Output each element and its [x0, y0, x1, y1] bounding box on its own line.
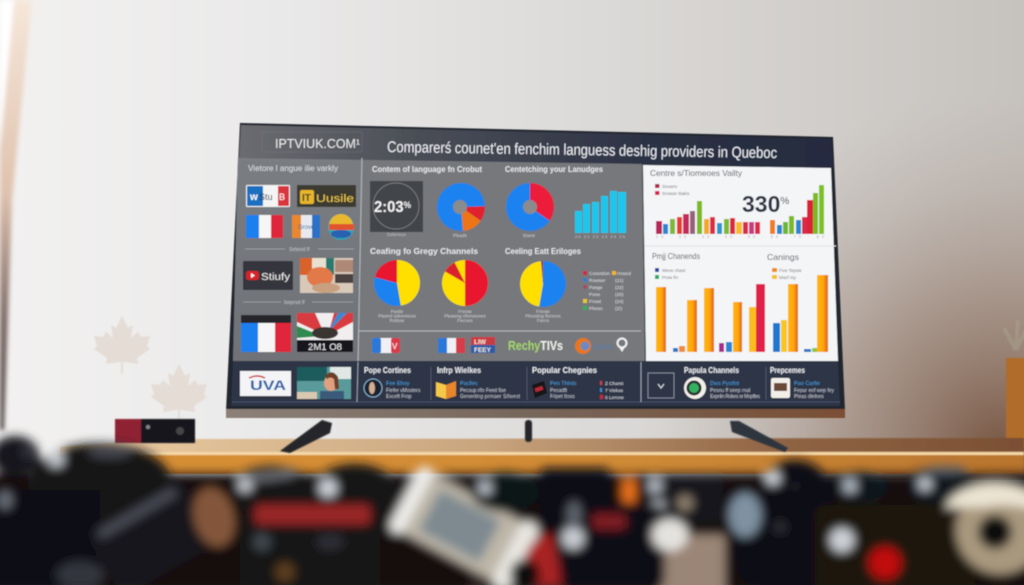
stat tile 2:03%: 2:03: [374, 199, 406, 216]
logo: orange globe: [575, 338, 613, 354]
info block: Pope Cortines: Flefer vMosters: [386, 388, 421, 394]
info block: Popular Chegnies: Pen Thirds: [550, 381, 577, 387]
info block: Pope Cortines: Pope Cortines: [364, 366, 411, 375]
screen header bar: Comparerś counet'en fenchim languess deshig providers in Queboc: [387, 139, 777, 162]
info block: Prepcemes: Pleas dlelnes: [794, 394, 824, 400]
TV bezel: [226, 123, 845, 411]
logo: live feey: FEEY: [474, 347, 492, 354]
logo: UVA: [240, 371, 291, 396]
lower chart legends: Miarf Isy: [779, 275, 797, 280]
donut chart 1: [437, 183, 485, 238]
pie chart 5: Frieste: [536, 309, 550, 314]
logo: wStub: w: [249, 192, 258, 203]
pie chart 4: Frieste: [458, 309, 472, 314]
lower chart legends: Five Tepsie: [779, 268, 802, 273]
blurred foreground camera gear: [0, 436, 1024, 585]
logo: IT Uusile: Uusile: [316, 193, 354, 205]
screen header bar: [239, 125, 833, 168]
logo: V badge: V: [392, 342, 398, 351]
pie legend: [583, 271, 631, 312]
TV set: [226, 123, 845, 418]
info block: Papula Channels: Dws Pystfot: [710, 381, 740, 387]
upper chart legend: Snowre: [662, 184, 678, 189]
info block: Popular Chegnies: Fripet Itoxs: [550, 394, 575, 400]
info block: Popular Chegnies: 7 Viskas: [605, 388, 624, 394]
photo thumbnail: [297, 367, 351, 399]
lower chart legends: [655, 268, 802, 280]
TV chin: [226, 409, 845, 418]
logo: wStub: Stu: [259, 192, 273, 202]
stat 330%: 330: [742, 191, 780, 217]
photo collage: [300, 258, 353, 293]
small red and black device: [115, 419, 195, 443]
stat tile 2:03%: %: [404, 200, 411, 210]
center lumps: [471, 472, 539, 512]
middle lumps: [230, 466, 314, 514]
info block: Papula Channels: Pesou ff seep rnal: [710, 388, 750, 394]
cream ring lens: [956, 486, 1024, 574]
poster 2M1 O8: 2M1 O8: [308, 342, 342, 353]
lower chart legends: Weve chast: [662, 268, 686, 273]
logo: Grovc: Grovc: [298, 225, 314, 231]
divider label: [243, 300, 353, 306]
logo: wStub: [246, 185, 290, 207]
logo row: [359, 331, 641, 354]
info block: Papula Channels: [684, 366, 760, 400]
angled lens cylinder: [85, 478, 218, 585]
pie chart 5: Fiercs: [537, 318, 550, 323]
donut chart 2: [506, 183, 554, 238]
icon: maple leaf upper: [94, 316, 150, 374]
lower chart heading right: Canings: [767, 252, 799, 262]
info block: Prepcemes: Pao Carfie: [794, 381, 820, 387]
stat tile 2:03%: Delensus: [387, 232, 407, 237]
lower chart legends: Prow fin: [662, 275, 679, 280]
upper chart legend: [655, 184, 690, 196]
logo: Stiufy: [243, 261, 293, 290]
icon: pin: [618, 338, 626, 352]
info block: Pope Cortines: Exceft Frop: [386, 394, 412, 400]
chevron box: [648, 373, 674, 398]
pie legend: Pasge: [589, 285, 603, 291]
info block: Papula Channels: Expnlin Rokes or Mopftes: [710, 394, 760, 400]
upper chart legend: Srowan Bakis: [662, 191, 690, 196]
left lumps: [0, 436, 39, 476]
logo: Stiufy: Stiufy: [261, 272, 290, 283]
info block: Popular Chegnies: [532, 366, 624, 401]
stat 330%: %: [780, 196, 789, 207]
upper bar chart: 10 · 20 · 30 · 40 · 50 · 60 · 70 · 80: [656, 235, 824, 239]
info block: Infrp Wielkes: Pecsup rlfo Feed fise: [460, 388, 506, 394]
pie chart 4: Pleasing vfrensiones: [444, 314, 487, 318]
info block: Prepcemes: Prepcemes: [770, 366, 805, 375]
logo: live feey: LIW: [474, 339, 487, 346]
pie chart 3: Plastrd vidrenisces: [378, 314, 417, 318]
section heading: channels: Ceafing fo Gregy Channels: [370, 246, 478, 256]
info block: Papula Channels: Papula Channels: [684, 366, 739, 375]
pie legend: (22): [615, 285, 624, 291]
TV stand legs: [280, 420, 788, 453]
pie chart 3: Pastle: [391, 309, 404, 314]
white cylinder: [387, 463, 542, 585]
section heading: your language: Centetching your Lanudges: [505, 165, 603, 174]
divider label: [245, 247, 354, 253]
pie chart 4: Fiecses: [457, 318, 473, 323]
info block: Prepcemes: [770, 366, 835, 400]
info block: Popular Chegnies: Pecadft: [550, 388, 568, 394]
lower chart heading left: Pmjj Chanends: [652, 251, 700, 261]
donut chart 2: Doest: [523, 233, 536, 238]
logo: V badge: [372, 338, 400, 353]
pie legend: (2!): [615, 306, 623, 312]
divider label: Iseprsd If: [284, 300, 305, 306]
cyan bar chart: [575, 191, 626, 239]
pie chart 3: Rolisse: [390, 318, 405, 323]
info block: Pope Cortines: Fee Ehoy: [386, 381, 410, 387]
right lumps: [757, 460, 833, 536]
pie legend: (21): [615, 278, 624, 284]
big flag: [241, 315, 291, 352]
shelf: [36, 438, 1024, 474]
upper chart heading: Centre s/Tiomeoes Vailty: [650, 168, 743, 178]
pie chart 5: Pleusting florsces: [525, 314, 561, 318]
info block: Popular Chegnies: 6 Lerone: [605, 395, 624, 401]
window frame: [0, 0, 32, 430]
pie legend: Rowser: [589, 278, 606, 284]
section heading: east: Ceeling Eatt Eriloges: [505, 246, 581, 256]
screen header bar: IPTVIUK.COM¹: [275, 137, 360, 151]
info block: Infrp Wielkes: Infrp Wielkes: [437, 366, 481, 375]
pie chart 3: [374, 260, 420, 323]
divider label: Selwod If: [289, 247, 310, 253]
logo: RechyTIVs: RechyTIVs: [508, 338, 563, 353]
gray content area: [233, 158, 645, 362]
poster 2M1 O8: [297, 313, 353, 353]
pie legend: Hosed: [617, 271, 631, 277]
cyan bar chart: 20 21 22 23 24 25: [575, 234, 626, 239]
stat tile 2:03%: [370, 181, 423, 237]
pie chart 5: [520, 261, 566, 323]
lower bar chart: [656, 275, 828, 352]
logo: round badge: [328, 214, 354, 240]
pie legend: Pheso: [589, 306, 603, 312]
section heading: content language: Contem of language fn Crobut: [372, 165, 482, 174]
info block: Popular Chegnies: Popular Chegnies: [532, 366, 598, 375]
left column heading: Vietore l angue ilie varkly: [248, 164, 338, 173]
pie legend: (20): [615, 292, 624, 298]
logo: orange globe: Goods: [592, 344, 613, 351]
donut chart 1: Pleads: [453, 233, 468, 238]
logo: wStub: B: [279, 192, 285, 202]
left column panel: [233, 158, 362, 362]
pie legend: Pone: [589, 292, 601, 298]
pie chart 4: [442, 260, 488, 323]
flag small: [438, 338, 465, 353]
white chart panel: [643, 165, 838, 361]
info block: Infrp Wielkes: Generting prmaer Sifwest: [460, 394, 521, 400]
bottom navy strip: [231, 361, 840, 406]
pie legend: Frowt: [589, 299, 602, 305]
logo: IT Uusile: IT: [302, 193, 311, 204]
logo: Grovc: [292, 215, 320, 238]
wooden post and plant right: [1004, 320, 1024, 448]
upper bar chart: [656, 185, 824, 239]
info block: Pope Cortines: [364, 366, 421, 400]
info block: Popular Chegnies: Z Charst: [605, 381, 624, 387]
pie legend: (24): [615, 299, 624, 305]
info block: Infrp Wielkes: Pacfiec: [460, 381, 478, 387]
icon: maple leaf lower: [151, 364, 207, 422]
flag tricolour: [246, 215, 283, 238]
logo: UVA: UVA: [250, 377, 286, 393]
pie legend: Conetdon: [589, 271, 610, 277]
logo: live feey: [471, 337, 495, 354]
info block: Prepcemes: Fepur eof wep fey: [794, 388, 835, 394]
info block: Infrp Wielkes: [436, 366, 521, 400]
logo: IT Uusile: [297, 185, 356, 207]
